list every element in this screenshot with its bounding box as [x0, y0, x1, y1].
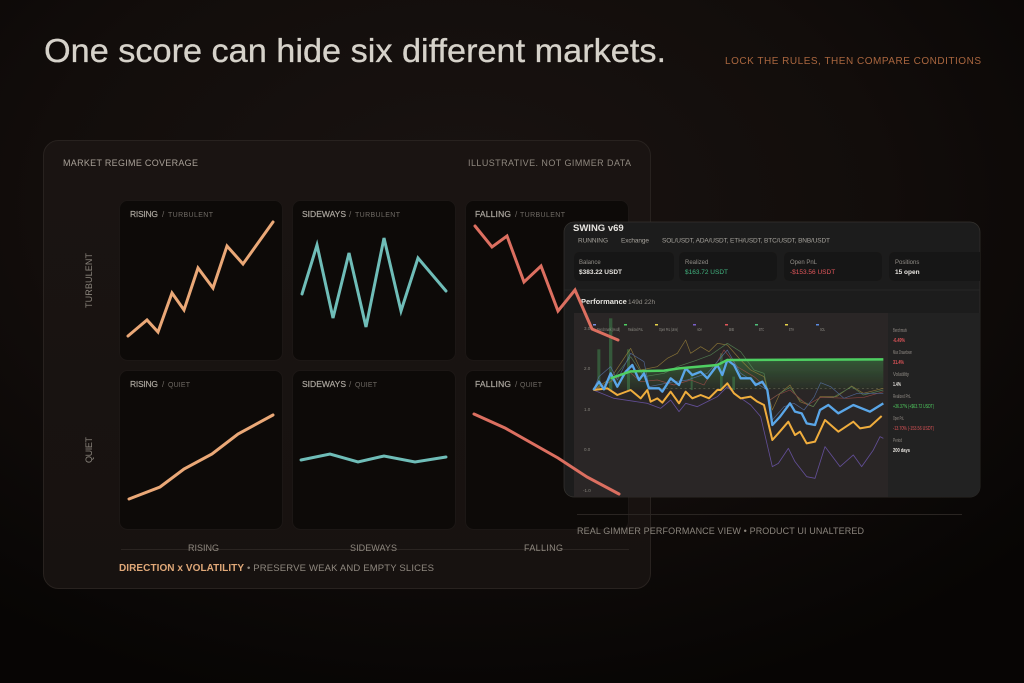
metrics sidebar: Period — [893, 438, 902, 444]
metrics sidebar: +36.37% (+$63.72 USDT) — [893, 404, 934, 410]
cell: rising quiet: QUIET — [168, 382, 191, 389]
metrics sidebar — [893, 328, 934, 454]
performance heading: 149d 22h — [628, 299, 655, 306]
cell: sideways quiet — [292, 370, 456, 530]
volume bars — [597, 318, 735, 390]
cell: rising quiet — [120, 370, 282, 530]
metrics sidebar: Max Drawdown — [893, 350, 912, 356]
chart legend — [593, 324, 825, 332]
stat card: balance: Balance — [579, 260, 601, 266]
chart legend: Benchmark (Hodl) — [597, 327, 620, 332]
stat card: open pnl: Open PnL — [790, 260, 818, 266]
cell: sideways quiet: QUIET — [355, 382, 378, 389]
row label: turbulent: TURBULENT — [84, 252, 94, 308]
metrics sidebar: Realized PnL — [893, 394, 911, 400]
metrics sidebar: Open PnL — [893, 416, 904, 422]
product header: Exchange — [621, 238, 649, 244]
footnote: • PRESERVE WEAK AND EMPTY SLICES — [247, 563, 434, 574]
cell: falling turbulent: / — [515, 210, 518, 219]
chart y axis — [583, 326, 591, 493]
metrics sidebar: Benchmark — [893, 328, 907, 334]
performance heading — [581, 297, 655, 306]
stat card: realized: Realized — [685, 260, 708, 266]
chart background — [574, 313, 980, 497]
stat card: realized: $163.72 USDT — [685, 269, 728, 276]
chart y axis: -1.0 — [583, 488, 591, 493]
thick lines — [593, 383, 882, 443]
line: falling turbulent — [475, 226, 618, 340]
cell: rising turbulent — [120, 200, 282, 360]
chart legend: ETH — [789, 327, 794, 332]
product header: SWING v69 — [573, 223, 624, 234]
cell: falling turbulent: FALLING — [475, 209, 511, 219]
stat card: positions: 15 open — [895, 269, 920, 276]
subtitle: LOCK THE RULES, THEN COMPARE CONDITIONS — [725, 56, 981, 67]
product header — [573, 223, 830, 244]
stat card: open pnl: -$153.56 USDT — [790, 269, 835, 276]
panel note: ILLUSTRATIVE. NOT GIMMER DATA — [468, 158, 631, 168]
chart legend: BTC — [759, 327, 764, 332]
x axis: RISING — [188, 543, 219, 553]
panel: market regime coverage — [44, 140, 650, 588]
chart y axis: 3.0 — [584, 326, 591, 331]
cell: sideways turbulent: TURBULENT — [355, 212, 401, 219]
metrics sidebar background — [888, 313, 980, 497]
line: falling quiet — [474, 414, 619, 494]
cell: falling quiet: QUIET — [520, 382, 543, 389]
row label: quiet: QUIET — [84, 436, 94, 463]
cell: rising quiet: / — [162, 380, 165, 389]
stat card: open pnl — [784, 252, 882, 281]
cell: falling quiet: / — [515, 380, 518, 389]
thin asset lines — [593, 340, 883, 478]
metrics sidebar: 1.4% — [893, 382, 901, 388]
cell: falling turbulent — [466, 200, 628, 360]
chart legend: SOL — [820, 327, 825, 332]
cell: falling quiet: FALLING — [475, 379, 511, 389]
chart y axis: 0.0 — [584, 447, 591, 452]
performance chart — [593, 318, 883, 478]
chart y axis: 1.0 — [584, 407, 591, 412]
chart legend: Open PnL (Unre) — [659, 327, 678, 332]
chart legend: ADA — [697, 327, 702, 332]
metrics sidebar: -13.70% (-153.56 USDT) — [893, 426, 934, 432]
cell: falling turbulent: TURBULENT — [520, 212, 566, 219]
product header: RUNNING — [578, 238, 608, 244]
metrics sidebar: 31.4% — [893, 360, 904, 366]
panel: product screenshot — [564, 222, 980, 497]
cell: sideways turbulent: SIDEWAYS — [302, 209, 346, 219]
cell: rising turbulent: RISING — [130, 209, 158, 219]
cell: sideways quiet: SIDEWAYS — [302, 379, 346, 389]
cell: rising quiet: RISING — [130, 379, 158, 389]
chart legend: Realized PnL — [628, 327, 643, 332]
cell: falling quiet — [466, 370, 628, 530]
product header: SOL/USDT, ADA/USDT, ETH/USDT, BTC/USDT, BNB/USDT — [662, 238, 830, 244]
stat card: positions: Positions — [895, 260, 919, 266]
x axis: SIDEWAYS — [350, 543, 397, 553]
caption: REAL GIMMER PERFORMANCE VIEW • PRODUCT UI UNALTERED — [577, 526, 864, 536]
chart legend: BNB — [729, 327, 734, 332]
stat card: positions — [889, 252, 980, 281]
cell: sideways turbulent — [292, 200, 456, 360]
performance heading: Performance — [581, 297, 627, 306]
stat card: realized — [679, 252, 777, 281]
metrics sidebar: -6.49% — [893, 338, 905, 344]
cell: sideways quiet: / — [349, 380, 352, 389]
cell: sideways turbulent: / — [349, 210, 352, 219]
stat card: balance: $383.22 USDT — [579, 269, 622, 276]
x axis: FALLING — [524, 543, 563, 553]
metrics sidebar: Volatility — [893, 372, 909, 378]
x axis — [121, 543, 629, 553]
cell: rising turbulent: TURBULENT — [168, 212, 214, 219]
metrics sidebar: 200 days — [893, 448, 910, 454]
cell: rising turbulent: / — [162, 210, 165, 219]
stat card: balance — [574, 252, 674, 281]
title: One score can hide six different markets. — [44, 32, 666, 69]
footnote — [119, 563, 434, 574]
realized area — [593, 359, 883, 390]
footnote: DIRECTION x VOLATILITY — [119, 563, 244, 574]
chart y axis: 2.0 — [584, 366, 591, 371]
panel heading: MARKET REGIME COVERAGE — [63, 158, 198, 168]
